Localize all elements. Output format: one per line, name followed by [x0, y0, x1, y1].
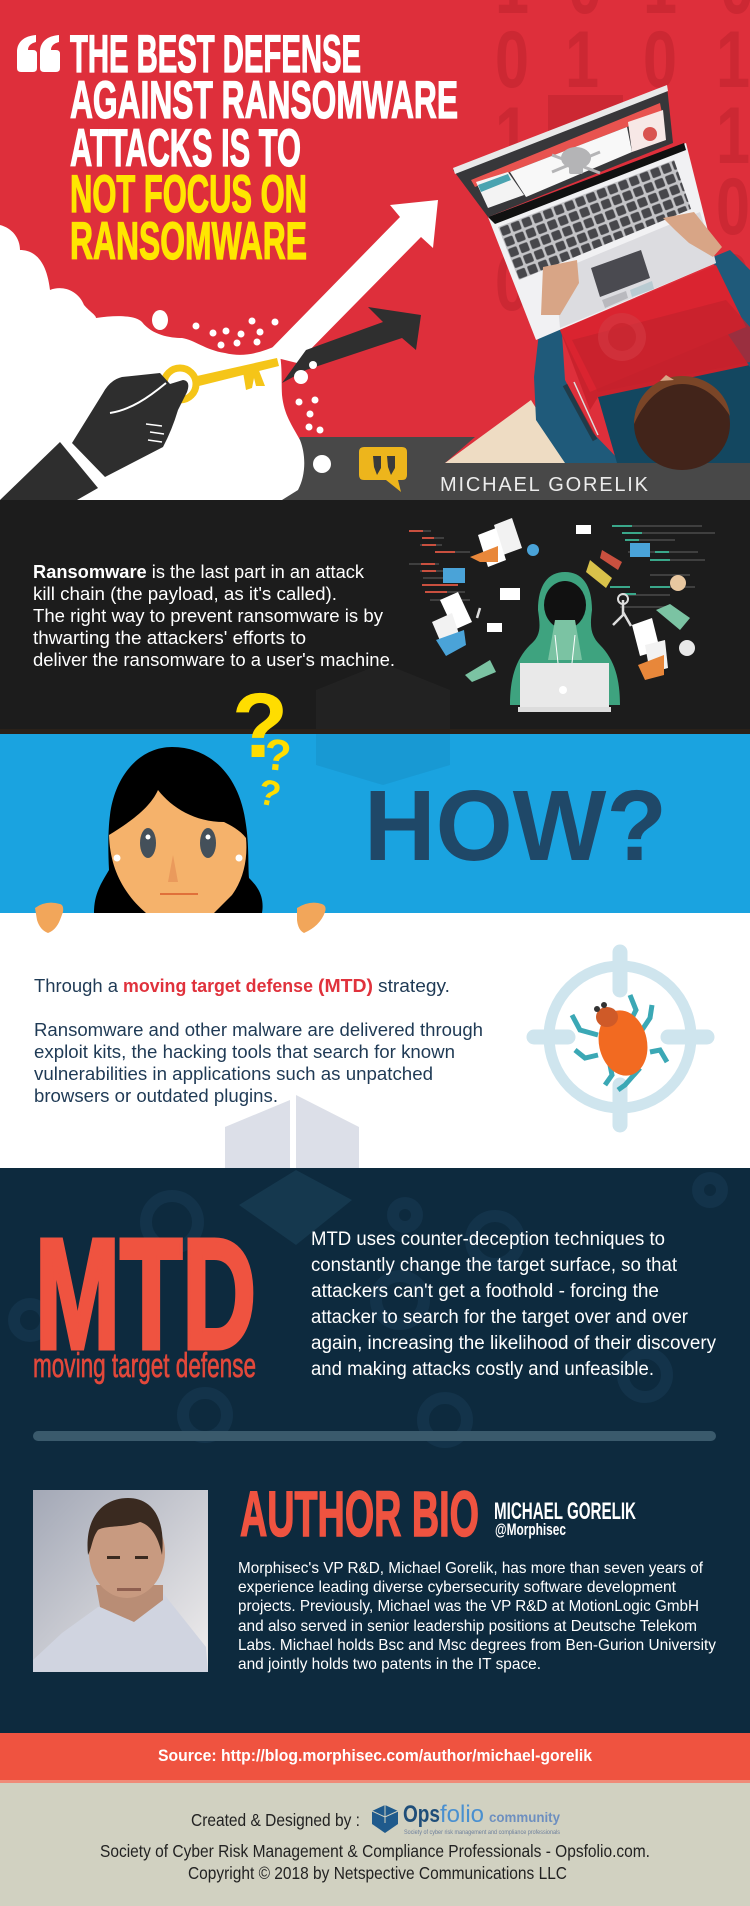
binary digits background: 0 [495, 238, 529, 328]
laptop screen [453, 86, 673, 217]
footer credits: Copyright © 2018 by Netspective Communications LLC [188, 1863, 567, 1883]
panel: footer [0, 1783, 750, 1906]
panel: source bar [0, 1733, 750, 1783]
strategy heading: (MTD) [318, 975, 373, 996]
binary digits background: 0 [643, 15, 677, 105]
question marks: ? [255, 770, 285, 815]
hands [35, 903, 326, 933]
strategy heading: strategy. [378, 975, 450, 996]
watermark hexagon [225, 1095, 359, 1168]
intro text: Ransomware is the last part in an attack [33, 561, 365, 582]
code lines [409, 526, 715, 607]
title: AGAINST RANSOMWARE [70, 71, 458, 130]
title: NOT FOCUS ON [70, 165, 307, 224]
binary digits background: 1 [565, 15, 599, 105]
watermark hex [316, 734, 450, 785]
gear watermarks [14, 1178, 722, 1442]
footer credits [100, 1841, 650, 1883]
skull icon [552, 147, 600, 174]
touchpad [591, 250, 650, 297]
logo: Opsfolio community: community [489, 1809, 560, 1825]
author name: MICHAEL GORELIK [440, 474, 649, 496]
MTD paragraph: MTD uses counter-deception techniques to [311, 1229, 665, 1250]
intro text: kill chain (the payload, as it's called). [33, 583, 337, 604]
MTD paragraph [311, 1229, 716, 1380]
title [70, 25, 458, 271]
footer credits: Society of Cyber Risk Management & Compliance Professionals - Opsfolio.com. [100, 1841, 650, 1861]
cloud [0, 225, 304, 500]
documents and bubbles [432, 518, 695, 682]
how heading: HOW? [364, 770, 667, 882]
logo: Opsfolio community: Ops [403, 1801, 440, 1828]
panel: moving target explanation [0, 903, 750, 1168]
MTD subtitle: moving target defense [33, 1347, 256, 1385]
hands [541, 260, 579, 315]
icon: bug in crosshair [534, 952, 707, 1125]
author name and handle [494, 1498, 636, 1539]
icon: key [164, 358, 279, 400]
icon: quote bubble [359, 447, 407, 492]
white arrow [265, 200, 438, 363]
keyboard [498, 160, 691, 280]
author bio text [238, 1560, 716, 1673]
author bio text: Labs. Michael holds Bsc and Msc degrees from Ben-Gurion University [238, 1637, 716, 1654]
strategy body [34, 1019, 483, 1106]
logo: Opsfolio community [372, 1801, 560, 1836]
strategy body: browsers or outdated plugins. [34, 1085, 278, 1106]
question marks: ? [232, 675, 288, 777]
icon: opening quote marks [17, 35, 60, 72]
panel: how [0, 675, 750, 913]
MTD paragraph: attacker to search for the target over and over [311, 1307, 689, 1328]
laptop and person [453, 85, 750, 470]
woman illustration [94, 747, 263, 913]
strategy heading: moving target defense [123, 975, 313, 996]
MTD paragraph: again, increasing the likelihood of their discovery [311, 1333, 716, 1354]
author name and handle: MICHAEL GORELIK [494, 1498, 636, 1525]
laptop base [488, 143, 716, 340]
author bio text: projects. Previously, Michael was the VP R&D at MotionLogic GmbH [238, 1598, 699, 1615]
hacker laptop [520, 663, 609, 707]
author name and handle: @Morphisec [495, 1520, 566, 1539]
title: THE BEST DEFENSE [70, 25, 361, 84]
intro text: thwarting the attackers' efforts to [33, 627, 306, 648]
MTD heading: MTD [35, 1207, 256, 1382]
keys [477, 600, 631, 626]
author bio heading: AUTHOR BIO [240, 1478, 479, 1550]
source link: Source: http://blog.morphisec.com/author/michael-gorelik [158, 1746, 592, 1765]
strategy heading [34, 975, 450, 996]
binary digits background: 0 [495, 15, 529, 105]
intro text: deliver the ransomware to a user's machine. [33, 649, 395, 670]
strategy body: Ransomware and other malware are delivered through [34, 1019, 483, 1040]
desk [445, 400, 570, 463]
strategy heading: Through a [34, 975, 119, 996]
hacker illustration [409, 518, 715, 712]
MTD paragraph: constantly change the target surface, so that [311, 1255, 678, 1276]
author bio text: and also served in senior leadership positions at Deutsche Telekom [238, 1618, 697, 1635]
dark arrow [282, 307, 421, 383]
created by label: Created & Designed by : [191, 1810, 360, 1830]
binary digits background [495, 0, 750, 367]
author bio text: and jointly holds two patents in the IT space. [238, 1656, 541, 1673]
red overlay on base [560, 265, 746, 392]
intro text [33, 561, 395, 670]
author bio text: experience leading diverse cybersecurity software development [238, 1579, 677, 1596]
strategy body: exploit kits, the hacking tools that search for known [34, 1041, 455, 1062]
panel: hero [0, 0, 750, 500]
panel: MTD [0, 1168, 750, 1733]
binary digits background: 1 [495, 91, 529, 181]
question marks: ? [262, 730, 293, 781]
dark base bar [280, 437, 750, 500]
intro text: The right way to prevent ransomware is by [33, 605, 384, 626]
logo: Opsfolio community: Society of cyber risk management and compliance professionals [404, 1830, 560, 1836]
logo: Opsfolio community: folio [440, 1801, 484, 1828]
author photo [33, 1490, 208, 1672]
MTD paragraph: and making attacks costly and unfeasible. [311, 1359, 654, 1380]
strategy body: vulnerabilities in applications such as unpatched [34, 1063, 433, 1084]
question marks [232, 675, 293, 815]
title: RANSOMWARE [70, 212, 307, 271]
title: ATTACKS IS TO [70, 119, 301, 178]
white dots [152, 310, 331, 473]
MTD paragraph: attackers can't get a foothold - forcing the [311, 1281, 659, 1302]
author bio text: Morphisec's VP R&D, Michael Gorelik, has more than seven years of [238, 1560, 704, 1577]
icon: hand holding key [0, 373, 188, 500]
hood [510, 572, 620, 705]
panel: ransomware intro [0, 500, 750, 734]
head [634, 378, 730, 470]
